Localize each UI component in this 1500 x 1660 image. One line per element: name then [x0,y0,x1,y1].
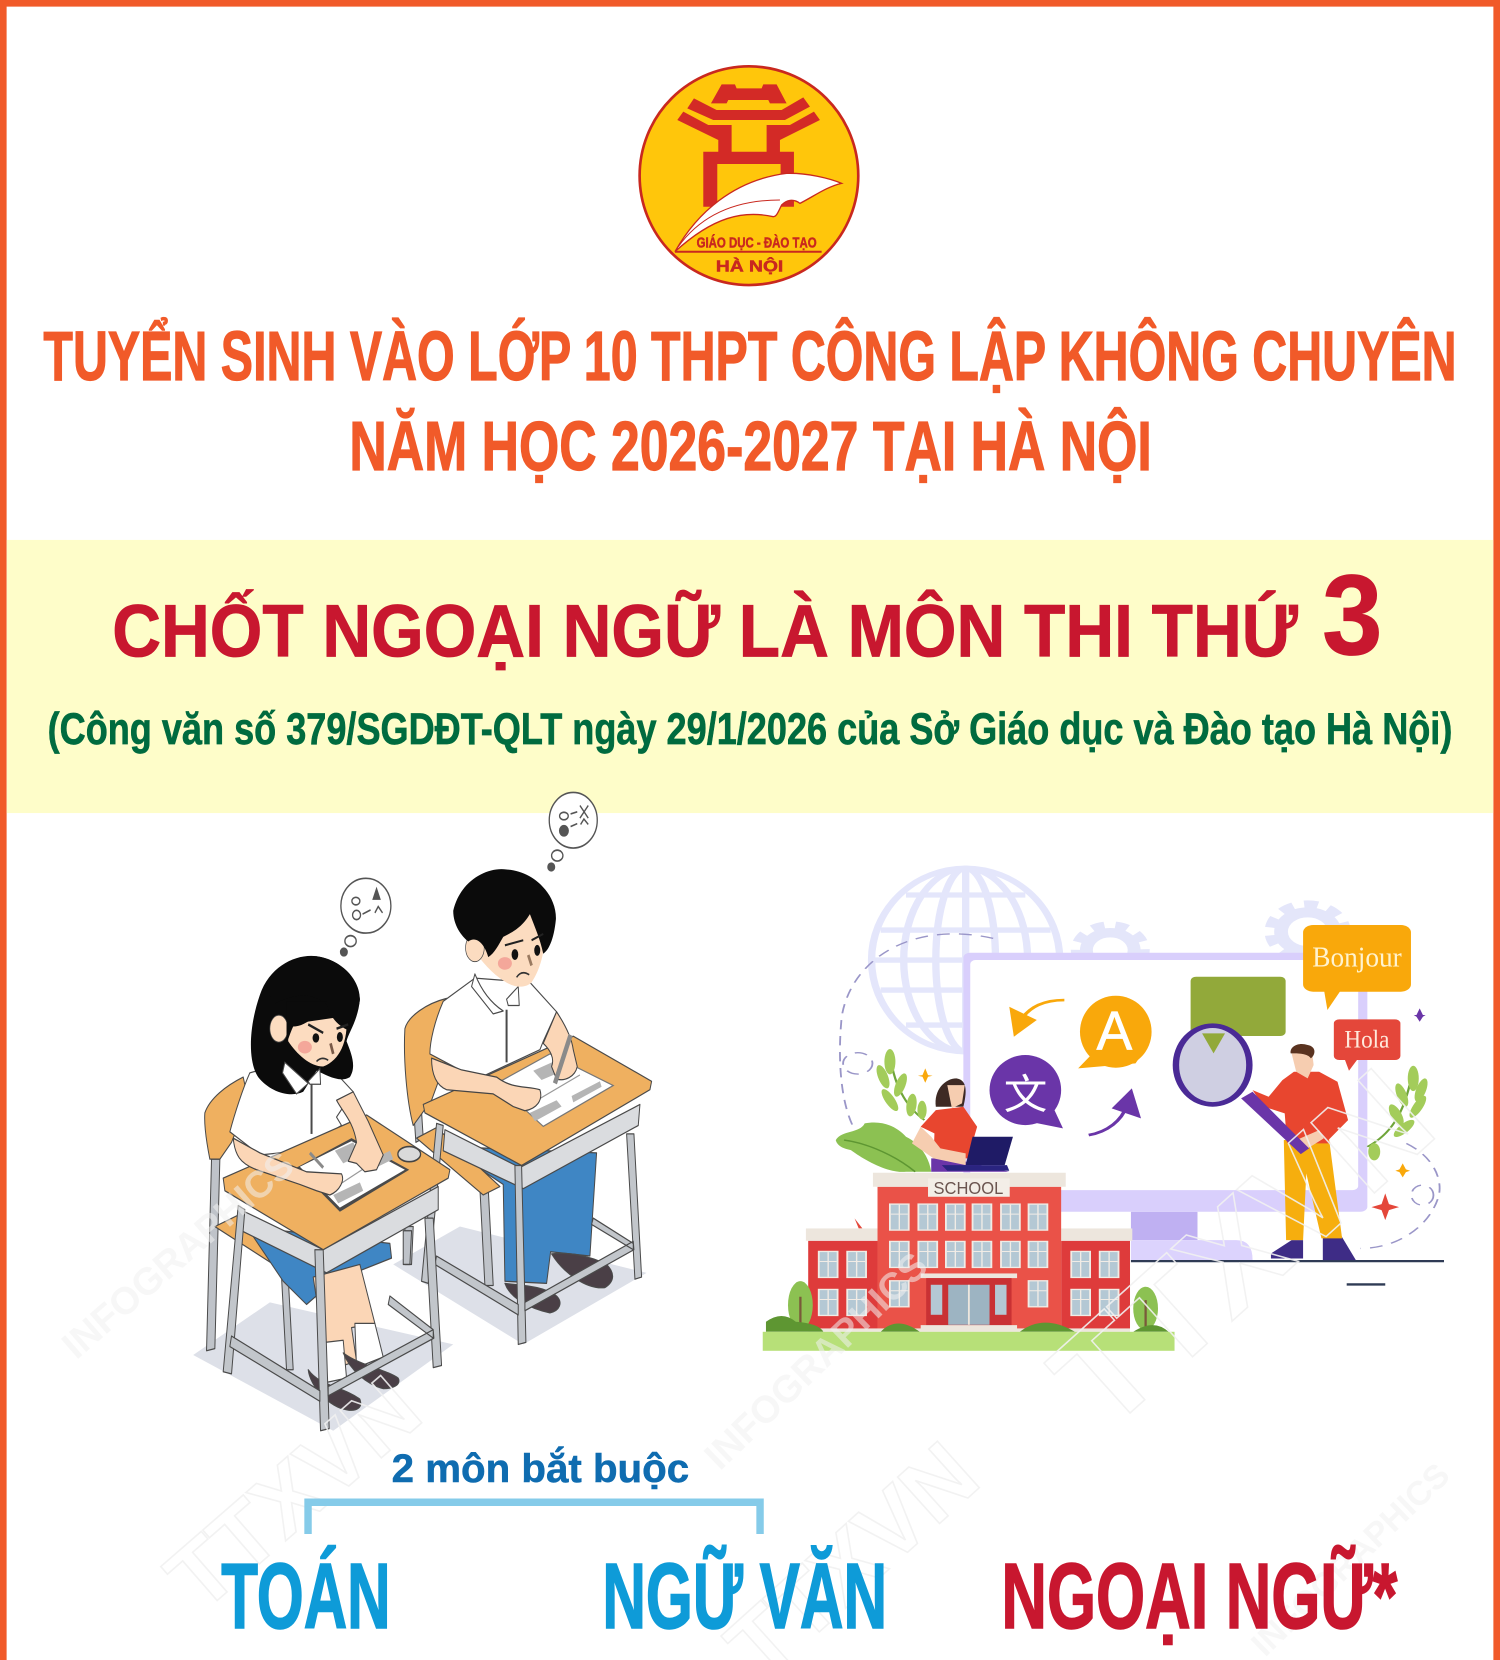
illustration: students taking exam [194,792,652,1432]
boy's thought bubble [548,792,597,871]
boy's desk [422,1036,652,1344]
bubble: Bonjour: Bonjour [1312,942,1402,973]
logo: Hanoi education department: HÀ NỘI [716,258,783,276]
large leaf [836,1123,931,1172]
bubble: A [1078,996,1152,1068]
sparkles [918,1008,1426,1220]
school sign [928,1178,1010,1198]
bubble: Hola [1334,1019,1400,1071]
bubble: Hola: Hola [1344,1025,1390,1053]
globe [872,868,1060,1052]
bubble: green [1191,977,1286,1053]
gears [1076,904,1345,975]
girl's thought bubble [341,878,391,956]
bubble: Bonjour [1303,925,1411,1010]
girl's arms [233,1092,383,1195]
banner heading: CHỐT NGOẠI NGỮ LÀ MÔN THI THỨ [112,589,1298,672]
logo: Hanoi education department [638,65,860,286]
woman with laptop [912,1078,1013,1172]
compulsory subjects label: 2 môn bắt buộc [392,1445,689,1491]
watermarks: INFOGRAPHICS [55,1144,303,1367]
ground lines [1131,1261,1444,1284]
subject: math: TOÁN [221,1544,391,1648]
bubble: translation character [990,1055,1063,1128]
man with magnifier [1253,1044,1356,1260]
illustration: language learning and school [762,866,1444,1351]
subject: literature: NGỮ VĂN [602,1544,887,1648]
ground and trees [763,1281,1175,1351]
banner heading: 3 [1322,552,1382,679]
watermarks [55,1041,1461,1660]
watermarks: TTXVN [148,1358,439,1630]
monitor [963,953,1367,1260]
bracket: compulsory subjects [308,1502,760,1534]
girl at front desk [205,1062,412,1410]
yellow banner [7,540,1493,813]
watermarks: TTXVN [1023,1041,1461,1457]
arrows [1021,1000,1126,1135]
boy at back desk [404,974,613,1313]
bubble: translation character: 文 [1004,1062,1047,1121]
banner heading [112,552,1382,679]
school building [806,1173,1132,1330]
girl's desk [223,1115,450,1431]
left plant [874,1049,927,1120]
dashed orbit [840,934,1440,1248]
right plant [1367,1066,1430,1160]
watermarks: INFOGRAPHICS [697,1245,936,1478]
title [43,316,1457,485]
logo: Hanoi education department: GIÁO DỤC - ĐÀO TẠO [697,234,817,251]
bubble: A: A [1096,1000,1133,1062]
boy's arms [432,1012,577,1111]
school sign: SCHOOL [934,1179,1003,1198]
magnifying glass [1176,1026,1309,1154]
title: NĂM HỌC 2026-2027 TẠI HÀ NỘI [349,406,1152,485]
watermarks: INFOGRAPHICS [1244,1456,1457,1660]
floor shadows [193,1227,647,1431]
